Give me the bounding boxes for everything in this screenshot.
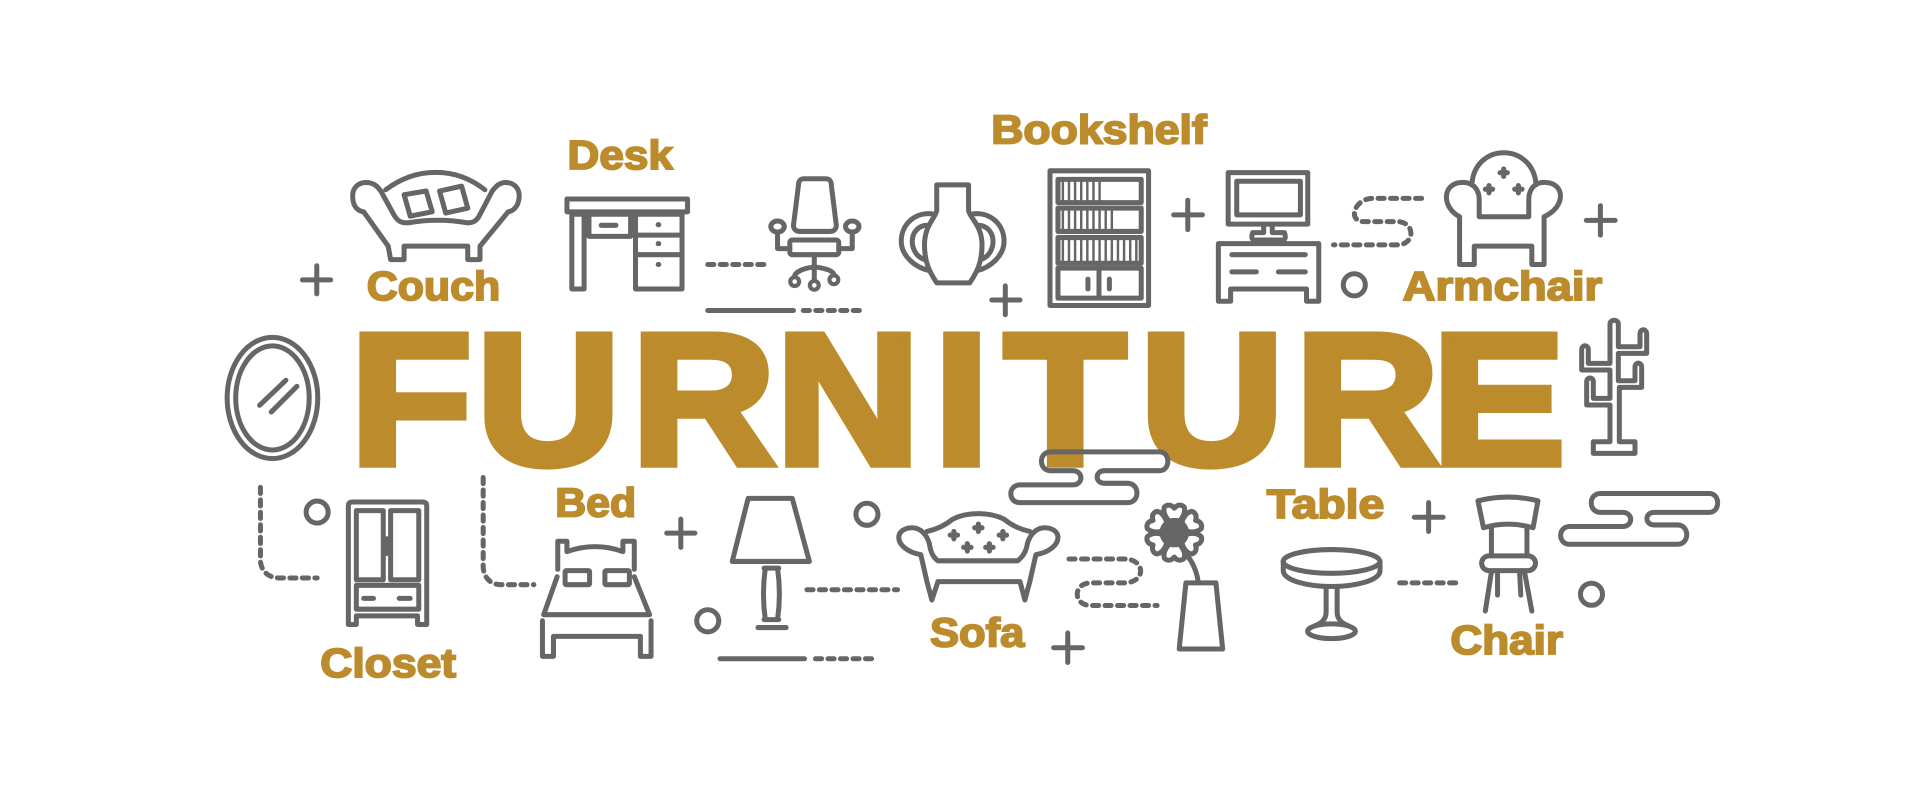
connector: dashes near lamp [807, 588, 898, 592]
label: Chair: Chair [1450, 617, 1563, 663]
icon: plus near vase [992, 286, 1020, 315]
icon: plus near bed [667, 519, 695, 547]
icon: tv on cabinet [1218, 173, 1319, 301]
icon: sofa [899, 514, 1058, 600]
connector: dashed L near bed [483, 478, 534, 585]
connector: desk to chair [708, 262, 765, 267]
label: Couch: Couch [367, 263, 500, 309]
icon: armchair [1446, 153, 1560, 264]
icon: couch [353, 172, 519, 260]
label: Desk: Desk [568, 132, 673, 178]
title: FURNITURE [350, 296, 1565, 505]
icon: plus near table [1414, 503, 1443, 531]
icon: closet [348, 502, 427, 624]
icon: bed [542, 541, 651, 656]
icon: circle near closet [306, 501, 328, 523]
icon: circle right of lamp [856, 503, 878, 525]
label: Closet: Closet [320, 640, 456, 686]
icon: circle near chair [1580, 583, 1602, 605]
icon: circle near tv [1343, 274, 1365, 296]
label: Sofa: Sofa [930, 610, 1025, 656]
icon: cloud right [1561, 493, 1718, 544]
icon: vase [901, 185, 1004, 283]
icon: mirror [227, 337, 318, 459]
icon: plus near armchair [1586, 206, 1615, 235]
connector: dashes table to chair [1400, 581, 1458, 585]
icon: plus near bookshelf [1174, 200, 1202, 230]
icon: plus top left [302, 266, 331, 294]
icon: table lamp [732, 498, 809, 628]
connector: dashed L near closet [260, 487, 317, 578]
connector: line under lamp [720, 657, 876, 661]
icon: plus near sofa [1054, 633, 1082, 662]
icon: desk [567, 199, 688, 289]
icon: cloud over title [1011, 452, 1168, 503]
label: Bed: Bed [555, 480, 636, 526]
icon: round table [1283, 550, 1380, 639]
icon: circle left of lamp [697, 610, 719, 632]
connector: line under chair [708, 308, 863, 313]
label: Bookshelf: Bookshelf [991, 106, 1207, 152]
icon: coat rack [1582, 320, 1647, 453]
icon: chair [1478, 497, 1538, 611]
icon: bookshelf [1050, 171, 1149, 306]
icon: flower in vase [1145, 505, 1223, 649]
connector: dashed S near tv [1333, 198, 1422, 245]
icon: office chair [771, 179, 859, 290]
label: Armchair: Armchair [1403, 263, 1603, 309]
label: Table: Table [1267, 481, 1384, 527]
connector: dashed S near sofa [1069, 559, 1157, 606]
